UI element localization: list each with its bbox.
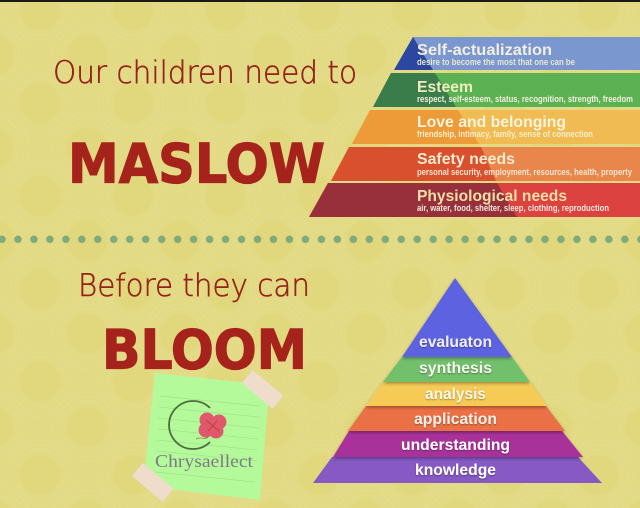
tier: esteem: [373, 73, 640, 107]
tier: love and belonging: [352, 110, 640, 144]
tier: synthesis: [383, 357, 530, 382]
icon: logo ring: [169, 401, 210, 449]
tier: application: application: [414, 411, 497, 428]
tier: understanding: [333, 431, 583, 457]
tier: safety needs: [331, 147, 640, 181]
tier: safety needs: Safety needs: [417, 151, 515, 168]
tier: physiological needs: Physiological needs: [417, 188, 567, 205]
tier: knowledge: knowledge: [415, 462, 496, 479]
tier: physiological needs: [309, 183, 640, 217]
sticky note with Chrysaellect logo: [132, 370, 283, 502]
note paper: [143, 373, 268, 500]
heading: BLOOM: BLOOM: [102, 318, 307, 382]
chart: Bloom pyramid: [313, 278, 602, 483]
tier: self-actualization: [394, 37, 640, 70]
tier: love and belonging: friendship, intimacy, family, sense of connection: [417, 129, 593, 139]
dotted divider: [0, 234, 640, 244]
tier: self-actualization: desire to become the most that one can be: [417, 57, 575, 67]
tier: love and belonging: Love and belonging: [417, 114, 566, 131]
heading: MASLOW: MASLOW: [68, 132, 325, 196]
tier: self-actualization: Self-actualization: [417, 42, 552, 59]
tier: understanding: understanding: [401, 437, 510, 454]
icon: flower: [196, 412, 226, 439]
tier: esteem: Esteem: [417, 79, 473, 96]
logo text: Chrysaellect: [155, 451, 253, 471]
tier: physiological needs: air, water, food, shelter, sleep, clothing, reproduction: [417, 203, 609, 213]
tier: analysis: [366, 382, 547, 406]
tier: application: [348, 406, 565, 431]
tier: evaluation: evaluaton: [419, 334, 492, 351]
tier: knowledge: [313, 457, 602, 483]
heading: Our children need to: Our children need to: [53, 55, 357, 91]
tier: synthesis: synthesis: [419, 360, 492, 377]
heading: Before they can: Before they can: [78, 268, 310, 304]
icon: tape bottom left: [132, 463, 173, 502]
tier: analysis: analysis: [425, 386, 486, 403]
icon: tape top right: [242, 370, 283, 409]
chart: Maslow pyramid: [309, 37, 640, 217]
tier: evaluation: [402, 278, 512, 357]
